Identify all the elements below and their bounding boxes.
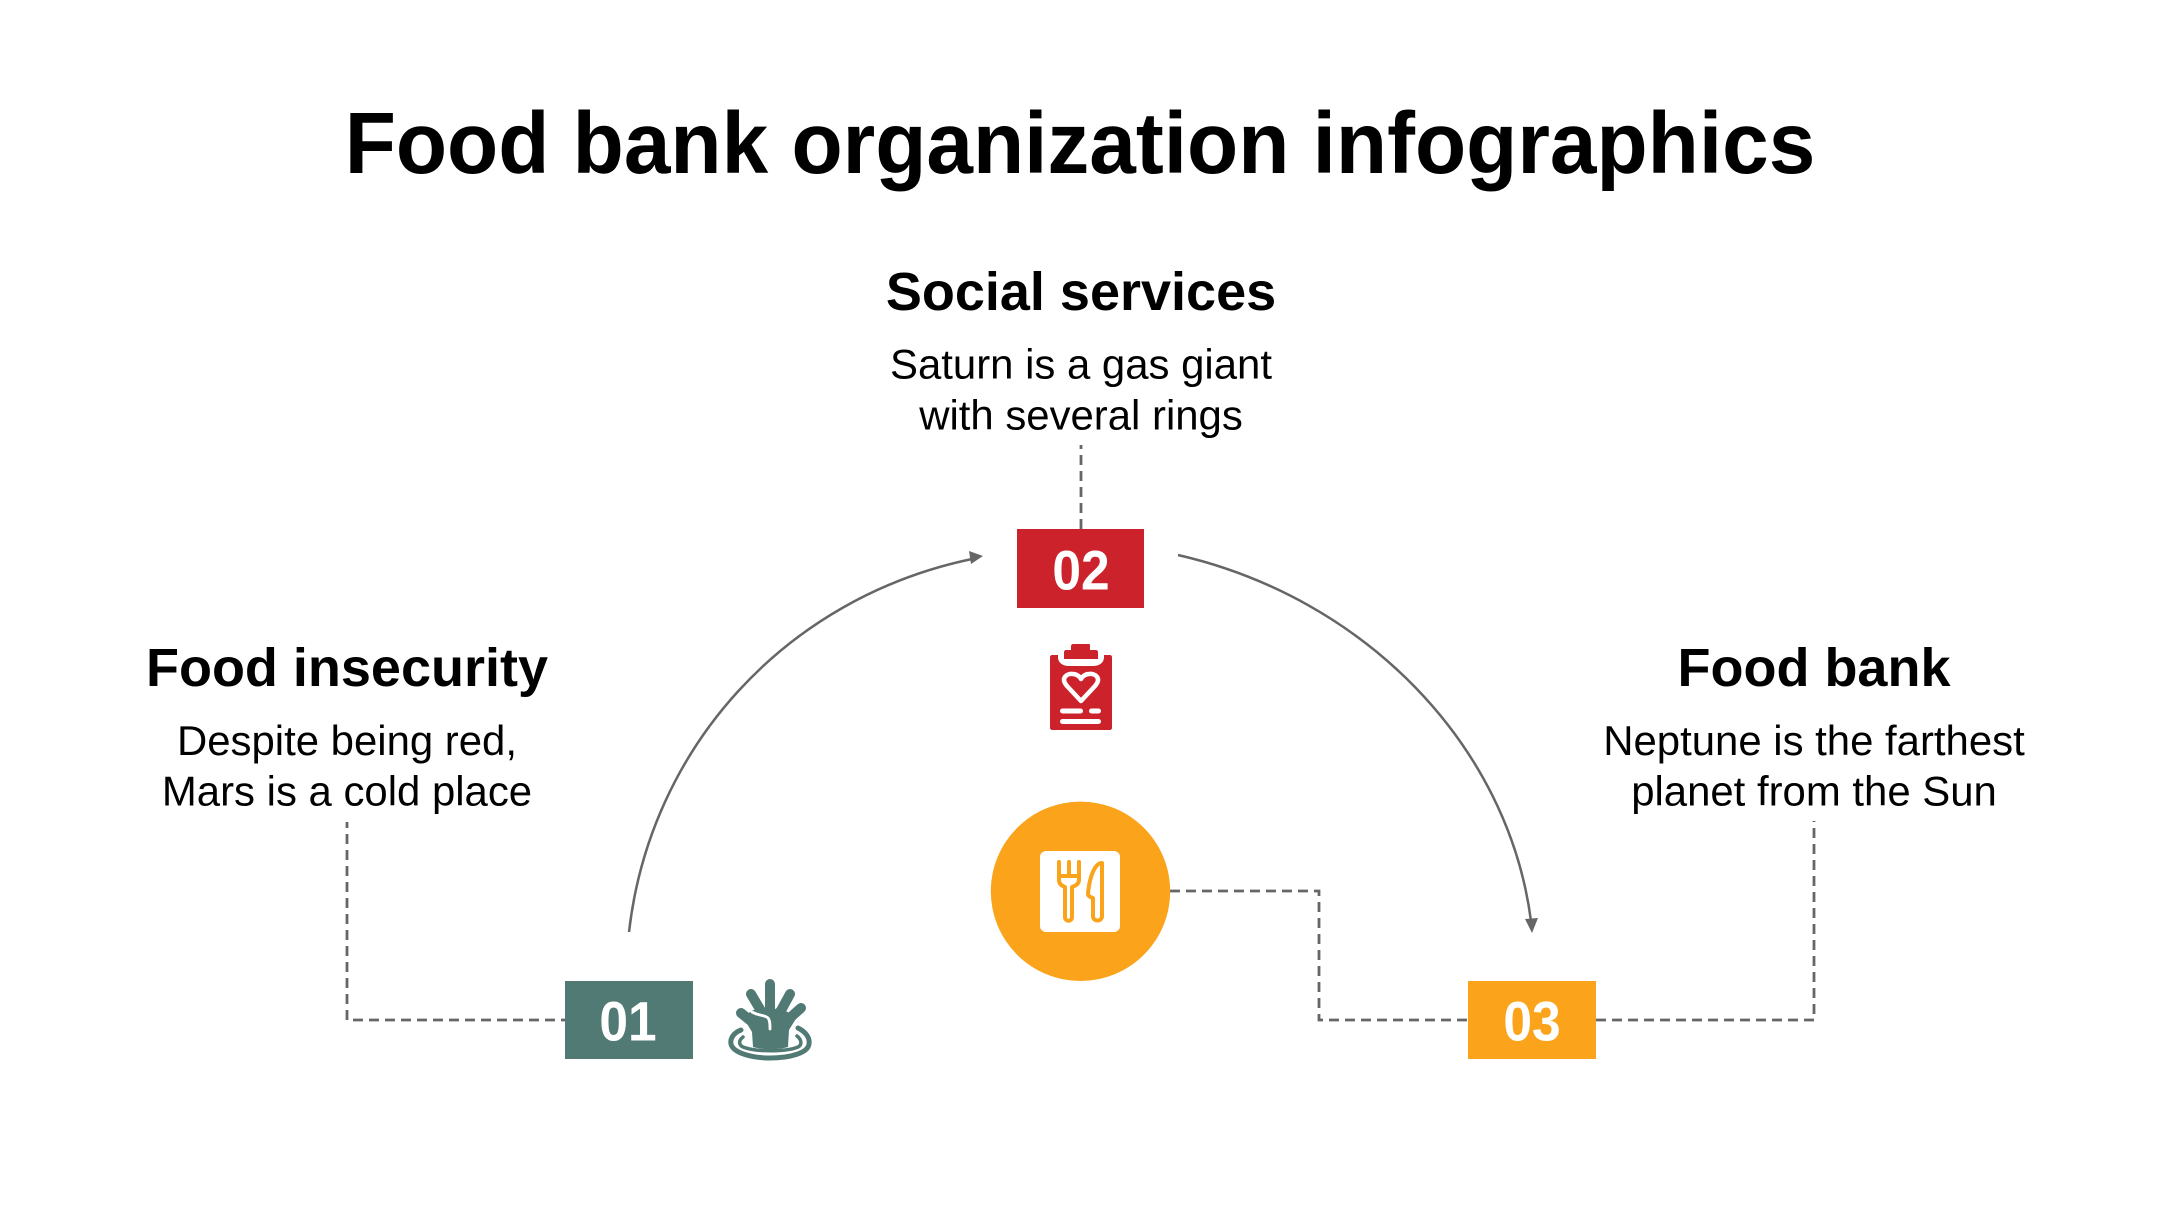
text block: food insecurity — [162, 717, 532, 814]
text block: food bank: planet from the Sun — [1631, 768, 1997, 814]
text block: food insecurity: Mars is a cold place — [162, 768, 532, 814]
icon: clipboard with heart — [1050, 644, 1112, 730]
panel: social services — [886, 262, 1276, 438]
text block: food bank: Neptune is the farthest — [1603, 717, 2025, 764]
arrow: from 01 to 02 — [629, 551, 983, 932]
panel: food insecurity — [146, 638, 548, 814]
number box 02 — [1017, 529, 1144, 608]
number box 01: 01 — [599, 991, 657, 1053]
text block: social services: Saturn is a gas giant — [890, 341, 1272, 388]
number box 03: 03 — [1503, 991, 1561, 1053]
heading: social services: Social services — [886, 262, 1276, 322]
connector: social services text to box 02 — [1080, 445, 1082, 529]
text block: food insecurity: Despite being red, — [177, 717, 517, 764]
connector: centre circle to box 03 — [1170, 891, 1468, 1020]
number box 01 — [565, 981, 693, 1059]
connector: food insecurity text to box 01 — [347, 822, 565, 1020]
panel: food bank — [1603, 638, 2025, 814]
icon: plate with fork and knife in orange circle — [991, 802, 1170, 981]
icon: hand sinking in water — [731, 984, 809, 1058]
heading: food bank: Food bank — [1678, 638, 1951, 698]
number box 03 — [1468, 981, 1596, 1059]
text block: social services — [890, 341, 1272, 438]
number box 02: 02 — [1052, 540, 1110, 602]
text block: food bank — [1603, 717, 2025, 814]
heading: food insecurity: Food insecurity — [146, 638, 548, 698]
text block: social services: with several rings — [918, 392, 1243, 438]
title: Food bank organization infographics — [345, 96, 1815, 192]
connector: box 03 to food bank text — [1596, 821, 1814, 1020]
arrow: from 02 to 03 — [1178, 555, 1538, 933]
